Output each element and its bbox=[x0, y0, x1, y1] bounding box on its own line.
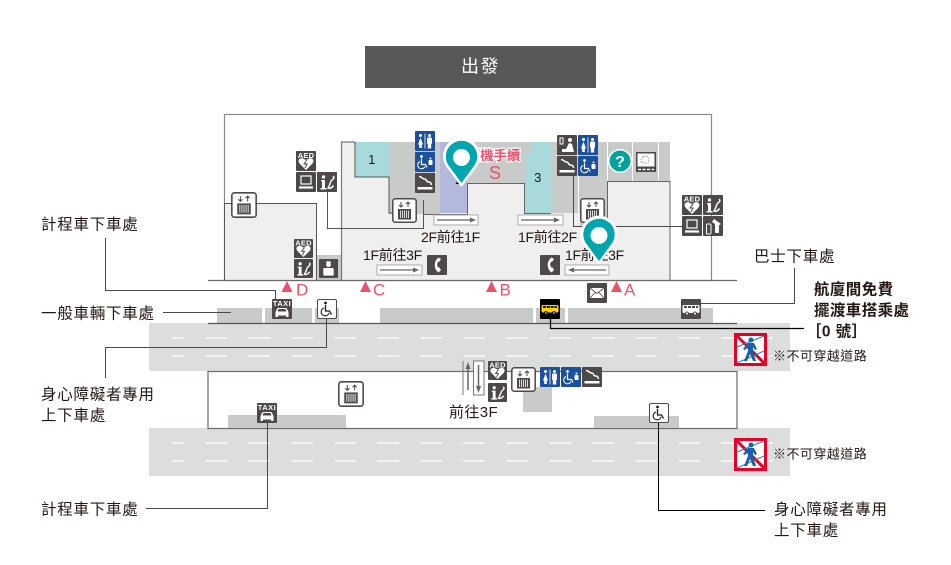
check-in label: S bbox=[489, 163, 501, 183]
icon: taxi upper bbox=[272, 299, 292, 319]
label: shuttle bbox=[806, 280, 910, 340]
roads bbox=[149, 323, 790, 476]
icons: right amenities bbox=[557, 135, 598, 176]
escalator labels: 1F to 2F: 1F前往2F bbox=[518, 229, 577, 245]
icon: mail bbox=[587, 283, 607, 303]
icons: centre amenities bbox=[415, 131, 435, 193]
check-in label bbox=[467, 147, 520, 183]
escalator labels: 1F to 2F bbox=[518, 215, 577, 245]
icon: information question bbox=[608, 149, 632, 173]
label: accessible right: 上下車處 bbox=[774, 522, 839, 540]
icons: left AED group: AED bbox=[298, 151, 315, 160]
label: accessible right bbox=[774, 500, 888, 540]
icons: lower left AED group: AED bbox=[295, 238, 312, 248]
text: to 3F: 前往3F bbox=[449, 404, 498, 421]
no crossing upper bbox=[736, 334, 867, 364]
icons: lower left AED group bbox=[294, 238, 338, 278]
icon: taxi island: TAXI bbox=[258, 403, 276, 412]
label: taxi drop-off lower: 計程車下車處 bbox=[41, 500, 139, 518]
check-in label: 搭機手續 bbox=[467, 147, 520, 163]
icons: island AED bbox=[488, 360, 507, 402]
panel: central concourse bbox=[342, 142, 670, 280]
icon: kiosk bbox=[636, 152, 656, 172]
curbside blocks bbox=[217, 308, 713, 323]
pin: entrance A bbox=[580, 216, 618, 265]
entrance markers: B bbox=[500, 280, 511, 300]
area: counter 3: 3 bbox=[534, 170, 542, 185]
title bbox=[365, 46, 596, 88]
label: accessible left: 身心障礙者專用 bbox=[41, 386, 155, 404]
no crossing lower: ※不可穿越道路 bbox=[773, 446, 867, 462]
label: accessible right: 身心障礙者專用 bbox=[774, 500, 888, 518]
title: 出發 bbox=[461, 56, 500, 76]
leader lines bbox=[106, 176, 804, 510]
label: shuttle: 擺渡車搭乘處 bbox=[814, 300, 910, 320]
escalator symbol bbox=[463, 361, 484, 395]
icon: shuttle bus bbox=[540, 299, 560, 319]
icon: phones bbox=[427, 255, 560, 275]
label: bus drop-off: 巴士下車處 bbox=[754, 248, 835, 266]
escalator labels: 1F to 3F right bbox=[565, 247, 624, 275]
area: counter 1 bbox=[355, 142, 393, 213]
icons: right AED group: AED bbox=[684, 194, 701, 204]
entrance markers: C bbox=[373, 280, 385, 300]
area: counter 3 bbox=[525, 142, 551, 213]
panel: island bbox=[208, 372, 737, 428]
icons: island amenities bbox=[540, 367, 602, 387]
icon: bus bbox=[681, 299, 701, 319]
ground line bbox=[208, 280, 737, 282]
icons: left AED group bbox=[296, 151, 337, 192]
road edge line bbox=[208, 322, 737, 324]
label: accessible left: 上下車處 bbox=[41, 406, 106, 424]
no crossing upper: ※不可穿越道路 bbox=[773, 348, 867, 364]
icon: wheelchair upper bbox=[318, 300, 336, 318]
area: counter 2: 2 bbox=[455, 172, 463, 187]
icon: information question: ? bbox=[615, 154, 625, 171]
entrance markers: A bbox=[624, 280, 636, 300]
label: general vehicles: 一般車輛下車處 bbox=[41, 304, 155, 322]
label: shuttle: 航廈間免費 bbox=[814, 280, 894, 298]
label: taxi drop-off: 計程車下車處 bbox=[41, 216, 139, 234]
entrance markers bbox=[282, 280, 636, 300]
label: accessible left bbox=[41, 386, 155, 424]
escalator labels: 2F to 1F: 2F前往1F bbox=[421, 229, 480, 245]
icon: taxi island bbox=[257, 403, 277, 423]
area: counter 1: 1 bbox=[368, 152, 376, 167]
escalator labels: 1F to 3F left: 1F前往3F bbox=[363, 247, 422, 263]
label: shuttle: ［0 號］ bbox=[806, 322, 867, 340]
panel: terminal floor plan bbox=[224, 114, 712, 280]
pin: check-in bbox=[443, 138, 480, 187]
icons: right AED group bbox=[682, 194, 723, 236]
escalator labels: 2F to 1F bbox=[421, 215, 480, 245]
escalator labels: 1F to 3F left bbox=[363, 247, 422, 275]
icon: taxi upper: TAXI bbox=[273, 299, 291, 308]
icons: island AED: AED bbox=[489, 360, 506, 370]
entrance markers: D bbox=[296, 280, 308, 300]
escalator labels: 1F to 3F right: 1F前往3F bbox=[565, 247, 624, 263]
panel: left room bbox=[224, 204, 316, 280]
icon: wheelchair island bbox=[650, 404, 668, 422]
no crossing lower bbox=[736, 440, 867, 470]
elevators bbox=[232, 193, 604, 406]
